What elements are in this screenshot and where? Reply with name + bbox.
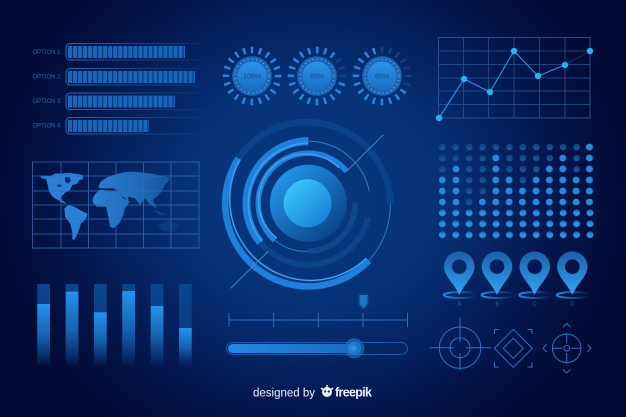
gauge 65% — [346, 40, 418, 112]
panel: option progress bars — [32, 44, 205, 134]
inner ring — [258, 153, 355, 251]
bar 1 — [37, 284, 50, 365]
icon: freepik mascot — [321, 385, 333, 397]
chart points — [436, 48, 593, 121]
panel: vertical bar chart — [37, 284, 192, 365]
outer ring — [225, 122, 390, 286]
panel: location pins — [444, 251, 590, 308]
gauge 65%: 65% — [375, 74, 389, 80]
map grid — [32, 162, 199, 248]
pin D — [557, 251, 590, 308]
icon: diamond target — [494, 329, 532, 367]
north and south america — [40, 173, 88, 240]
dim dots — [436, 142, 597, 240]
bar 4 — [122, 284, 135, 365]
bar 6 — [179, 284, 192, 365]
icon: directional target — [543, 324, 591, 373]
bar 3 — [94, 284, 107, 365]
pin A: A — [458, 302, 462, 308]
option 2 bar: OPTION 2 — [32, 74, 61, 80]
credit: designed by freepik: freepik — [335, 386, 372, 400]
gauge 85% — [285, 44, 349, 108]
option 1 bar: OPTION 1 — [32, 50, 61, 56]
panel: central radial dial — [225, 122, 390, 288]
gauge 100% — [225, 49, 279, 103]
pin B — [482, 251, 514, 308]
panel: target icons — [430, 318, 591, 373]
option 3 bar: OPTION 3 — [32, 99, 61, 105]
middle ring — [246, 141, 369, 265]
pin D: D — [570, 302, 574, 308]
credit: designed by freepik — [253, 385, 372, 400]
bright dots — [436, 144, 597, 240]
diagonal lines — [231, 135, 383, 288]
panel: dot matrix — [436, 142, 597, 240]
slider track — [226, 342, 408, 354]
option 2 bar — [32, 68, 205, 85]
credit: designed by freepik: designed by — [253, 388, 315, 400]
panel: progress slider — [226, 338, 408, 358]
scale line — [229, 313, 408, 327]
slider fill — [228, 344, 355, 353]
africa and eurasia — [93, 172, 178, 232]
pin C — [519, 251, 552, 308]
shield marker — [358, 293, 369, 310]
pin C: C — [533, 302, 537, 308]
option 1 bar — [32, 44, 205, 60]
panel: scale slider — [229, 293, 408, 327]
pin B: B — [495, 302, 499, 308]
chart grid — [438, 38, 590, 118]
chart line — [439, 51, 590, 118]
bar 2 — [66, 284, 78, 365]
option 3 bar — [32, 93, 205, 110]
dial core — [270, 165, 347, 242]
option 4 bar: OPTION 4 — [32, 124, 61, 130]
panel: line chart — [436, 38, 593, 121]
slider knob — [344, 338, 364, 358]
panel: radial gauges — [225, 40, 418, 112]
gauge 85%: 85% — [310, 74, 324, 80]
bar 5 — [151, 284, 163, 365]
panel: world map — [32, 162, 199, 248]
icon: crosshair — [430, 318, 491, 370]
option 4 bar — [32, 118, 205, 134]
pin A — [444, 251, 477, 308]
gauge 100%: 100% — [243, 74, 261, 80]
